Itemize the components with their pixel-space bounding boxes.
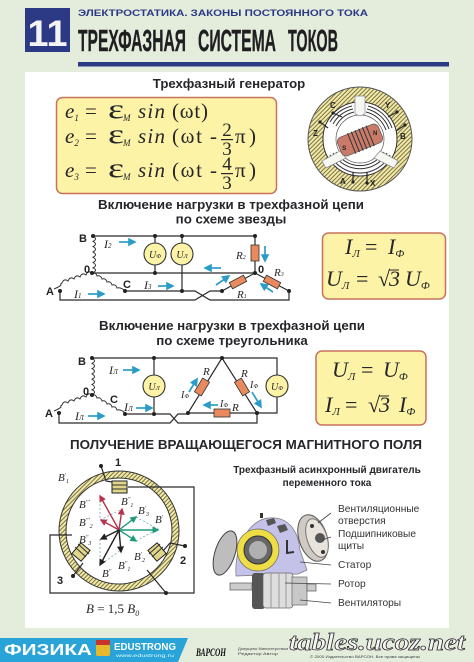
formula box: delta relations: √ <box>368 392 381 417</box>
icon: generator cross-section: A <box>340 177 346 186</box>
footer band: Допущено Министерством <box>238 647 289 651</box>
heading: delta connection: по схеме треугольника <box>156 333 308 348</box>
diagram: rotating field: '' <box>128 497 131 503</box>
formula box: generator EMF: - <box>210 124 217 148</box>
diagram: rotating field: ' <box>65 473 67 479</box>
diagram: rotating field: 2 <box>180 555 186 567</box>
formula box: delta relations: Ф <box>406 406 415 418</box>
diagram: rotating field: '' <box>86 535 89 541</box>
formula box: generator EMF: π) <box>235 158 256 182</box>
icon: generator cross-section: B <box>400 132 406 141</box>
diagram: rotating field: B <box>79 499 86 511</box>
heading: star connection: Включение нагрузки в трехфазной цепи <box>98 197 364 212</box>
diagram: rotating field: ''' <box>86 500 90 506</box>
circuit: star connection: R3 <box>273 267 284 279</box>
icon: generator cross-section: Z <box>313 129 318 138</box>
circuit: delta connection: IФ <box>219 399 228 410</box>
formula box: delta relations: I <box>399 392 406 417</box>
formula box: generator EMF: 1 <box>74 113 79 123</box>
diagram: rotating field: 3 <box>57 575 63 587</box>
motor part labels: Вентиляционные <box>338 504 420 515</box>
diagram: rotating field: ''' <box>86 518 90 524</box>
heading: induction motor <box>233 464 421 489</box>
section subtitle: ЭЛЕКТРОСТАТИКА. ЗАКОНЫ ПОСТОЯННОГО ТОКА <box>78 8 368 19</box>
diagram: rotating field: ' <box>145 506 147 512</box>
formula box: star relations: U <box>326 266 342 291</box>
formula box: generator EMF: M <box>122 172 131 182</box>
diagram: rotating field: 1 <box>66 479 69 485</box>
circuit: delta connection: R <box>231 402 239 414</box>
circuit: star connection: C <box>123 279 131 291</box>
circuit: delta connection: IФ <box>249 380 258 391</box>
formula box: star relations: Л <box>351 248 360 260</box>
formula box: generator EMF: e <box>65 158 74 182</box>
formula box: generator EMF: 3 <box>222 139 232 160</box>
circuit: delta connection: B <box>78 356 86 368</box>
formula box: delta relations: Л <box>331 406 340 418</box>
diagram: rotating field: ' <box>141 552 143 558</box>
formula: B = 1.5 B0: B = 1,5 B <box>86 601 135 616</box>
formula box: delta relations: = <box>345 392 357 417</box>
motor part labels: Вентиляторы <box>338 598 401 609</box>
formula box: generator EMF: ε <box>108 94 124 124</box>
circuit: delta connection <box>45 356 288 423</box>
formula box: star relations: Ф <box>395 248 404 260</box>
formula box: star relations: 3 <box>388 266 400 291</box>
circuit: delta connection: IЛ <box>74 409 85 423</box>
formula box: generator EMF: ε <box>108 119 124 149</box>
formula box: delta relations: I <box>325 392 332 417</box>
text: ТОКОВ <box>288 23 338 58</box>
diagram: rotating field <box>50 457 194 595</box>
circuit: star connection: UЛ <box>176 250 189 261</box>
circuit: delta connection: 0 <box>83 386 89 398</box>
formula box: generator EMF: = <box>85 158 97 182</box>
circuit: delta connection: A <box>45 408 53 420</box>
icon: generator cross-section: S <box>342 145 347 152</box>
formula box: generator EMF: 3 <box>73 172 79 182</box>
circuit: delta connection: C <box>110 394 118 406</box>
footer band: Редактор Автор <box>238 652 278 656</box>
circuit: star connection: 0 <box>258 264 264 276</box>
formula box: generator EMF: sin <box>138 124 165 148</box>
icon: generator cross-section: C <box>330 101 336 110</box>
formula box: generator EMF: sin <box>138 158 165 182</box>
heading: star connection: по схеме звезды <box>176 212 286 226</box>
circuit: star connection <box>46 233 291 301</box>
circuit: star connection: I3 <box>143 278 152 292</box>
formula box: star relations <box>322 233 446 299</box>
title: СИСТЕМА <box>198 23 276 58</box>
circuit: delta connection: IЛ <box>108 363 119 377</box>
circuit: star connection: A <box>46 286 54 298</box>
heading: rotating magnetic field: ПОЛУЧЕНИЕ ВРАЩАЮЩЕГОСЯ МАГНИТНОГО ПОЛЯ <box>70 438 422 452</box>
formula box: star relations: I <box>388 234 395 259</box>
icon: generator cross-section: N <box>373 131 377 137</box>
footer band: www.edustrong.ru <box>116 653 175 658</box>
circuit: delta connection: R <box>202 366 210 378</box>
motor part labels: щиты <box>338 541 364 552</box>
diagram: rotating field: 3 <box>145 512 149 518</box>
formula box: generator EMF: π) <box>235 124 256 148</box>
formula box: generator EMF: M <box>122 138 131 148</box>
diagram: rotating field: 3 <box>87 541 91 547</box>
formula box: delta relations: U <box>383 357 399 382</box>
diagram: rotating field: B <box>58 472 65 484</box>
formula: B = 1.5 B0: 0 <box>135 609 139 618</box>
heading: generator: Трехфазный генератор <box>153 76 305 91</box>
icon: generator cross-section <box>308 87 412 191</box>
number badge: 11 <box>28 13 68 54</box>
circuit: star connection: B <box>79 233 87 245</box>
formula box: generator EMF: (ωt <box>172 124 202 148</box>
formula box: star relations: Ф <box>421 280 430 292</box>
motor part labels: Подшипниковые <box>338 529 416 540</box>
footer band: EDUSTRONG <box>114 642 176 653</box>
heading: delta connection <box>99 318 365 348</box>
heading: delta connection: Включение нагрузки в трехфазной цепи <box>99 318 365 333</box>
footer band: ВАРСОН <box>195 645 226 659</box>
motor part labels <box>338 504 420 609</box>
formula box: generator EMF: M <box>122 113 131 123</box>
formula box: generator EMF: (ωt <box>172 158 202 182</box>
title rule <box>78 62 449 66</box>
formula box: star relations: U <box>405 266 421 291</box>
formula box: generator EMF: = <box>85 124 97 148</box>
formula box: generator EMF: e <box>65 99 74 123</box>
white content panel <box>25 72 449 628</box>
circuit: delta connection: IФ <box>180 390 189 401</box>
icon: generator cross-section: Y <box>385 101 391 110</box>
formula box: generator EMF: = <box>85 99 97 123</box>
circuit: delta connection: UФ <box>271 382 283 393</box>
circuit: star connection: 0 <box>84 264 90 276</box>
diagram: rotating field: ' <box>162 515 164 521</box>
heading: induction motor: Трехфазный асинхронный двигатель <box>233 464 421 476</box>
formula box: star relations: I <box>345 234 352 259</box>
footer band <box>0 638 421 662</box>
motor part labels: Ротор <box>338 579 366 590</box>
formula box: delta relations: Ф <box>399 371 408 383</box>
diagram: rotating field: B <box>138 505 145 517</box>
diagram: rotating field: 1 <box>130 503 133 509</box>
heading: star connection <box>98 197 364 226</box>
motor part labels: Статор <box>338 560 372 571</box>
formula box: generator EMF: 2 <box>74 138 79 148</box>
circuit: star connection: I1 <box>73 287 82 301</box>
formula box: generator EMF: e <box>65 124 74 148</box>
diagram: rotating field: 2 <box>90 524 93 530</box>
circuit: delta connection: UЛ <box>148 382 161 393</box>
formula box: generator EMF: 2 <box>222 120 232 141</box>
formula box: generator EMF: - <box>210 158 217 182</box>
formula box: generator EMF: sin <box>138 99 165 123</box>
footer band: ФИЗИКА <box>4 642 93 659</box>
formula box: delta relations: = <box>361 357 373 382</box>
diagram: rotating field: '' <box>109 569 112 575</box>
formula box: star relations: = <box>365 234 377 259</box>
diagram: rotating field: '' <box>125 561 128 567</box>
diagram: rotating field: B <box>118 560 125 572</box>
diagram: rotating field: B <box>134 551 141 563</box>
heading: induction motor: переменного тока <box>283 478 372 489</box>
formula box: generator EMF: 3 <box>222 173 232 194</box>
formula box: star relations: = <box>356 266 368 291</box>
icon: generator cross-section: X <box>370 179 376 188</box>
formula box: delta relations: U <box>332 357 348 382</box>
formula box: delta relations <box>316 351 426 425</box>
formula box: generator EMF: (ωt) <box>172 99 208 123</box>
diagram: rotating field: B <box>79 534 86 546</box>
diagram: rotating field: 2 <box>142 558 145 564</box>
diagram: rotating field: B <box>155 514 162 526</box>
footer band: © 2000 Издательство ВАРСОН. Все права защищены <box>310 655 421 659</box>
circuit: delta connection: R <box>240 368 248 380</box>
circuit: star connection: R2 <box>235 250 246 262</box>
circuit: delta connection: IЛ <box>123 400 134 414</box>
formula box: star relations: Л <box>341 280 350 292</box>
circuit: star connection: R1 <box>236 289 247 301</box>
formula box: generator EMF: ε <box>108 153 124 183</box>
circuit: star connection: UФ <box>149 250 161 261</box>
formula box: delta relations: 3 <box>378 392 390 417</box>
illustration: induction motor <box>208 511 334 609</box>
diagram: rotating field: 1 <box>115 457 121 469</box>
diagram: rotating field: B <box>121 496 128 508</box>
diagram: rotating field: B <box>102 568 109 580</box>
formula box: star relations: √ <box>378 266 391 291</box>
formula box: generator EMF <box>56 94 276 194</box>
diagram: rotating field: B <box>79 517 86 529</box>
formula box: delta relations: Л <box>347 371 356 383</box>
motor part labels: отверстия <box>338 516 386 527</box>
title: ТРЕХФАЗНАЯ <box>78 23 186 58</box>
watermark: tables.ucoz.net <box>289 630 467 656</box>
formula box: generator EMF: 4 <box>222 154 232 175</box>
diagram: rotating field: 1 <box>127 567 130 573</box>
circuit: star connection: I2 <box>103 237 112 251</box>
